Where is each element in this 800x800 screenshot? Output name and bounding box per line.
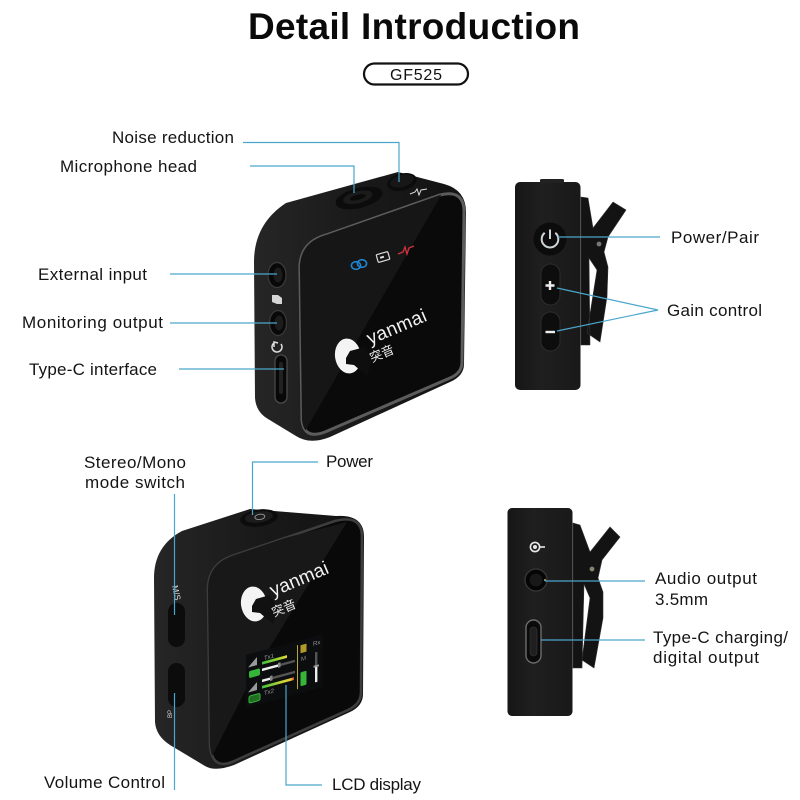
rx slider: [314, 651, 319, 683]
device: transmitter side view with clip: [515, 179, 626, 390]
callout: Microphone head: [60, 157, 354, 193]
callout: Type-C interface: Type-C interface: [29, 360, 157, 379]
side body: [515, 182, 580, 390]
label Tx1: Tx1: [264, 652, 275, 662]
face reflection: [208, 522, 346, 756]
front face: [300, 194, 464, 434]
callout: Type-C charging/digital output: Type-C charging/: [653, 628, 788, 647]
port: type-c: [275, 355, 287, 403]
callout: Noise reduction: [112, 128, 399, 182]
brand name: yanmai: [364, 306, 430, 350]
label Rx: Rx: [313, 639, 320, 648]
output battery: [300, 671, 306, 686]
receiver body: [154, 509, 364, 769]
mono marker: M: [301, 655, 306, 663]
callout: Type-C charging/digital output: [541, 628, 788, 667]
callout: Audio output 3.5mm: [545, 569, 757, 609]
callout: Audio output 3.5mm: 3.5mm: [655, 590, 708, 609]
side body: [508, 508, 572, 716]
callout: Audio output 3.5mm: Audio output: [655, 569, 757, 588]
microphone head: [333, 182, 385, 214]
callout: Stereo/Mono mode switch: Stereo/Mono: [84, 453, 186, 472]
jack: monitoring output: [270, 310, 286, 336]
callout: LCD display: [286, 685, 422, 794]
transmitter body: [254, 172, 466, 441]
status icon: battery: [376, 252, 390, 262]
port: type-c: [526, 620, 541, 663]
brand name: yanmai: [267, 558, 332, 602]
status icon: pulse: [398, 246, 414, 254]
clip: [573, 523, 620, 668]
slider 2: [262, 669, 295, 683]
jack: 3.5mm: [525, 569, 547, 591]
brand chinese: 突音: [268, 593, 299, 621]
divider: [297, 645, 298, 689]
clip: [581, 197, 626, 345]
power button: [239, 507, 279, 529]
power button: [534, 222, 566, 256]
status icon: link: [351, 260, 367, 269]
label Tx2: Tx2: [264, 687, 275, 697]
callout: External input: External input: [38, 265, 147, 284]
LCD screen: [246, 634, 323, 708]
volume button: [168, 663, 185, 707]
signal icon 1: [248, 657, 257, 667]
callout: Power: [252, 452, 373, 515]
device: receiver side view with clip: [508, 508, 620, 716]
top notch: [540, 179, 564, 183]
level bar 1: [262, 655, 287, 665]
volume legend: BP: [168, 710, 174, 718]
callout: Gain control: [557, 288, 762, 331]
callout: Stereo/Mono mode switch: [84, 453, 186, 615]
noise reduction button: [385, 170, 419, 194]
icon: return: [272, 342, 282, 352]
callout: Noise reduction: Noise reduction: [112, 128, 234, 147]
gain plus button: [541, 264, 560, 305]
callout: Stereo/Mono mode switch: mode switch: [85, 473, 185, 492]
icon: headphone input: [272, 295, 282, 304]
callout: Gain control: Gain control: [667, 301, 762, 320]
callout: Monitoring output: Monitoring output: [22, 313, 163, 332]
device: receiver front view: [154, 507, 364, 770]
title: Detail Introduction: [248, 6, 580, 47]
face reflection: [296, 190, 444, 440]
device: transmitter front view: [254, 170, 466, 441]
icon: audio output: [530, 542, 545, 552]
callout: Type-C charging/digital output: digital output: [653, 648, 759, 667]
callout: Power/Pair: Power/Pair: [671, 228, 759, 247]
battery icon 1: [249, 668, 260, 678]
callout: Power: Power: [326, 452, 373, 471]
battery icon 2: [249, 693, 260, 703]
signal icon 2: [248, 682, 257, 692]
level bar 2: [262, 677, 294, 689]
jack: external input: [268, 262, 286, 288]
callout: LCD display: LCD display: [332, 775, 422, 794]
logo mark: [239, 585, 278, 624]
model badge: [364, 64, 468, 84]
gain minus button: [541, 312, 560, 351]
front face: [208, 519, 362, 764]
stereo marker: [300, 644, 306, 653]
brand chinese: 突音: [366, 339, 397, 366]
callout: Volume Control: [44, 693, 174, 792]
callout: Volume Control: Volume Control: [44, 773, 165, 792]
switch legend: M/S: [170, 584, 183, 602]
noise symbol: [410, 189, 427, 195]
model badge: GF525: [390, 67, 442, 84]
callout: Microphone head: Microphone head: [60, 157, 197, 176]
mode switch: [168, 603, 185, 647]
slider 1: [262, 658, 295, 672]
logo mark: [334, 338, 360, 374]
